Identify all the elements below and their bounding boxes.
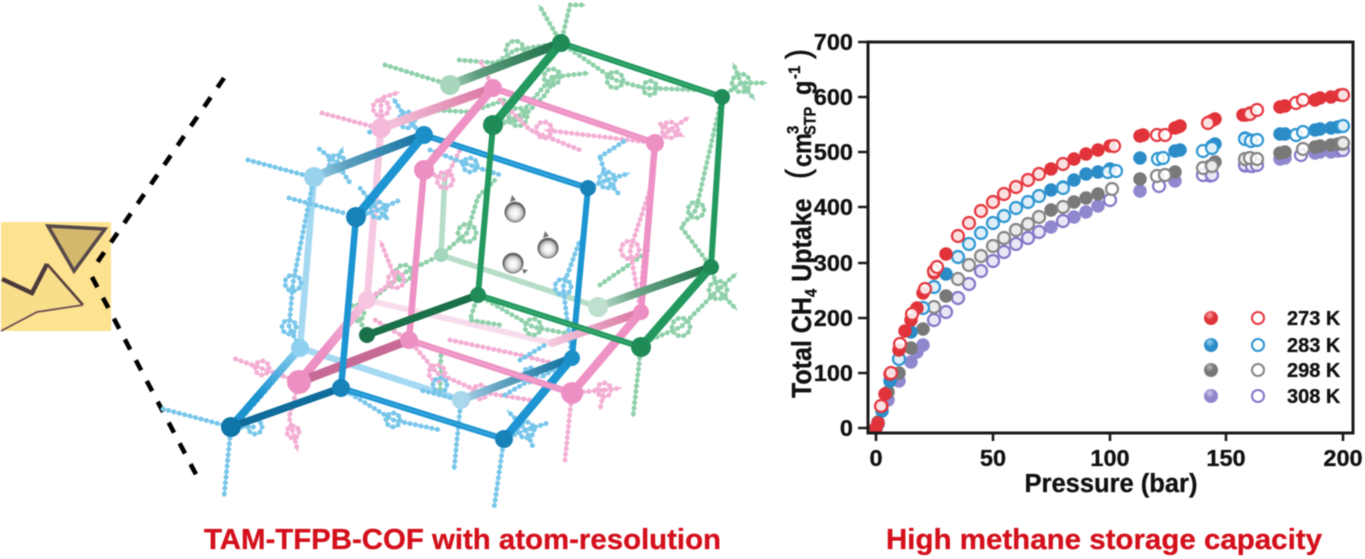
x axis tick labels bbox=[869, 445, 1363, 471]
y axis title: -1 bbox=[786, 66, 804, 79]
y axis title: 3 bbox=[785, 126, 803, 134]
legend row 308 K: 308 K bbox=[1287, 386, 1341, 408]
y axis title: Total CH bbox=[786, 297, 817, 398]
dashed zoom line upper bbox=[92, 78, 224, 270]
y axis tick labels: 300 bbox=[814, 250, 853, 276]
micrograph triangular crystal bbox=[48, 226, 105, 271]
x axis tick labels: 150 bbox=[1206, 445, 1246, 471]
plot frame and ticks bbox=[858, 42, 1353, 441]
x axis tick labels: 200 bbox=[1323, 445, 1363, 471]
y axis title: Uptake bbox=[786, 198, 817, 289]
y axis tick labels: 400 bbox=[814, 194, 853, 220]
y axis tick labels: 700 bbox=[814, 29, 853, 55]
x axis tick labels: 50 bbox=[980, 445, 1006, 471]
y axis tick labels bbox=[814, 29, 853, 441]
y axis tick labels: 100 bbox=[814, 360, 853, 386]
title: structure caption: TAM-TFPB-COF with atom-resolution bbox=[204, 524, 721, 556]
y axis title: g bbox=[788, 81, 817, 95]
x axis tick labels: 100 bbox=[1090, 445, 1130, 471]
legend row 273 K: 273 K bbox=[1287, 308, 1341, 330]
blue framework bbox=[221, 126, 596, 448]
panel: micrograph inset bbox=[1, 222, 111, 331]
y axis title: 4 bbox=[803, 289, 821, 297]
y axis tick labels: 600 bbox=[814, 84, 853, 110]
y axis tick labels: 200 bbox=[814, 305, 853, 331]
plot series 298 K bbox=[876, 137, 1349, 428]
x axis tick labels: 0 bbox=[869, 445, 883, 471]
dashed zoom line lower bbox=[92, 277, 200, 482]
pink framework bbox=[287, 79, 664, 404]
legend row 298 K: 298 K bbox=[1287, 360, 1341, 382]
green framework bbox=[359, 34, 730, 357]
plot series 308 K bbox=[876, 144, 1349, 428]
micrograph jagged crystal bbox=[1, 263, 83, 331]
panel: COF crystal structure bbox=[163, 5, 767, 508]
plot series 273 K bbox=[875, 89, 1349, 428]
y axis title: ( bbox=[778, 169, 816, 179]
legend row 283 K: 283 K bbox=[1287, 335, 1341, 357]
chart: methane uptake isotherms bbox=[778, 29, 1363, 498]
methane molecules bbox=[502, 195, 558, 274]
legend bbox=[1204, 308, 1341, 408]
y axis tick labels: 0 bbox=[840, 415, 853, 441]
y axis title bbox=[778, 49, 821, 398]
y axis title: STP bbox=[802, 107, 820, 135]
x axis title: Pressure (bar) bbox=[1025, 470, 1197, 498]
y axis title: ) bbox=[778, 49, 816, 59]
blue front vertical bbox=[332, 207, 366, 397]
title: chart caption: High methane storage capacity bbox=[886, 524, 1322, 556]
y axis title: cm bbox=[788, 133, 817, 167]
y axis tick labels: 500 bbox=[814, 139, 853, 165]
plot series 283 K bbox=[876, 120, 1349, 428]
ligand chains bbox=[163, 5, 767, 508]
faded back edges bbox=[300, 128, 598, 400]
